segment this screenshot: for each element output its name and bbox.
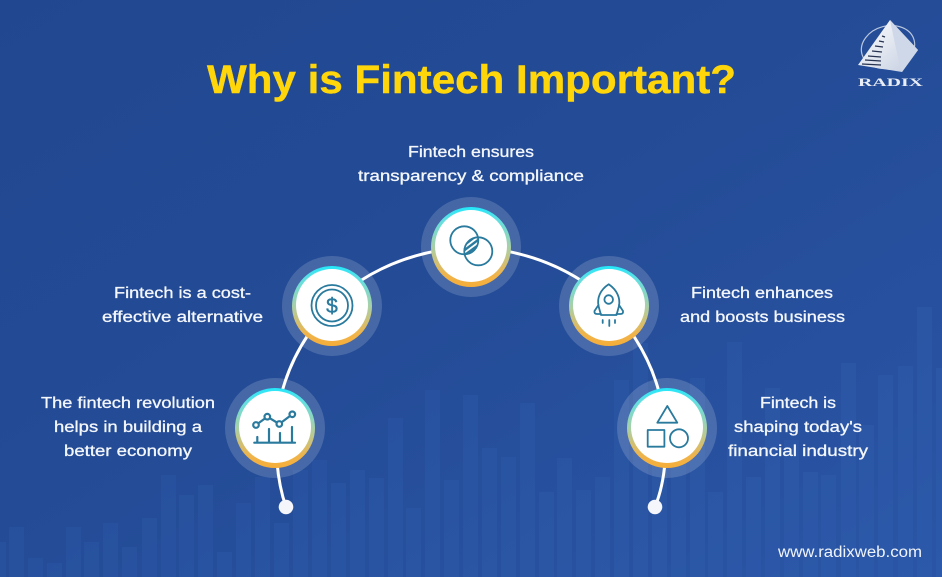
- text: enhances and boosts business: [680, 285, 845, 326]
- text: transparency and compliance: transparency & compliance: [358, 168, 584, 185]
- text: better economy: The fintech revolution: [41, 395, 215, 412]
- text: cost-effective alternative: [102, 285, 263, 326]
- icon: rocket: [594, 284, 623, 326]
- text: transparency and compliance: Fintech ensures: [408, 144, 534, 161]
- text: enhances and boosts business: Fintech enhances: [691, 285, 833, 302]
- logo: Radix: [856, 20, 924, 89]
- text: better economy: helps in building a: [54, 419, 202, 436]
- logo: Radix: RADIX: [858, 75, 924, 89]
- text: transparency and compliance: [358, 144, 584, 185]
- text: cost-effective alternative: effective alternative: [102, 309, 263, 326]
- text: shaping financial industry: financial industry: [728, 443, 868, 460]
- text: better economy: better economy: [64, 443, 192, 460]
- text: enhances and boosts business: and boosts business: [680, 309, 845, 326]
- text: shaping financial industry: Fintech is: [760, 395, 836, 412]
- node: cost-effective: [282, 256, 382, 356]
- node: transparency: [421, 197, 521, 297]
- icon: triangle, square, circle: [648, 406, 688, 447]
- text: shaping financial industry: shaping today's: [734, 419, 862, 436]
- icon: dollar coin: $: [326, 295, 338, 318]
- text: cost-effective alternative: Fintech is a cost-: [114, 285, 251, 302]
- node: financial industry: [617, 378, 717, 478]
- text: better economy: [41, 395, 215, 460]
- icon: line and bar chart: [253, 412, 295, 443]
- website url: www.radixweb.com: [777, 544, 922, 561]
- node: business boost: [559, 256, 659, 356]
- connecting arc: [277, 251, 665, 507]
- text: shaping financial industry: [728, 395, 868, 460]
- title: Why is Fintech Important?: [207, 58, 736, 102]
- end dot: [648, 500, 662, 514]
- node: economy chart: [225, 378, 325, 478]
- icon: overlapping circles: [450, 226, 492, 265]
- start dot: [279, 500, 293, 514]
- background bar chart: [0, 307, 942, 577]
